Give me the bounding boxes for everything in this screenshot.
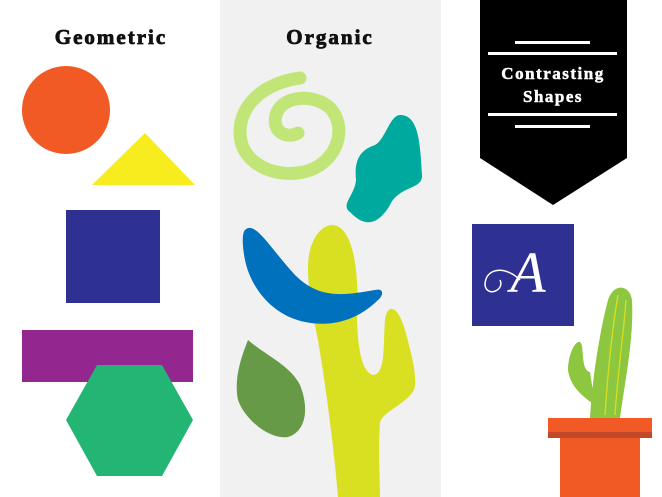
panel: organic background bbox=[220, 0, 441, 497]
shape: blue crescent bbox=[243, 228, 382, 324]
shape: yellow cactus bbox=[308, 225, 415, 497]
shape: square bbox=[66, 210, 160, 303]
shape: spiral bbox=[240, 78, 339, 173]
shape: green leaf bbox=[237, 340, 305, 437]
heading: Geometric: Geometric bbox=[55, 25, 167, 49]
icon: letter A tile bbox=[472, 224, 574, 326]
banner: Contrasting Shapes: Contrasting bbox=[501, 64, 605, 83]
shape: triangle bbox=[92, 133, 195, 185]
shape: circle bbox=[22, 66, 110, 154]
shape: teal blob bbox=[347, 115, 422, 222]
heading: Organic: Organic bbox=[286, 25, 374, 49]
banner: Contrasting Shapes: Shapes bbox=[523, 87, 583, 106]
icon: potted cactus bbox=[548, 288, 652, 497]
shape: rectangle bbox=[22, 330, 193, 382]
shape: hexagon bbox=[66, 365, 193, 476]
banner: Contrasting Shapes bbox=[480, 0, 627, 205]
icon: letter A tile: A bbox=[506, 240, 546, 305]
